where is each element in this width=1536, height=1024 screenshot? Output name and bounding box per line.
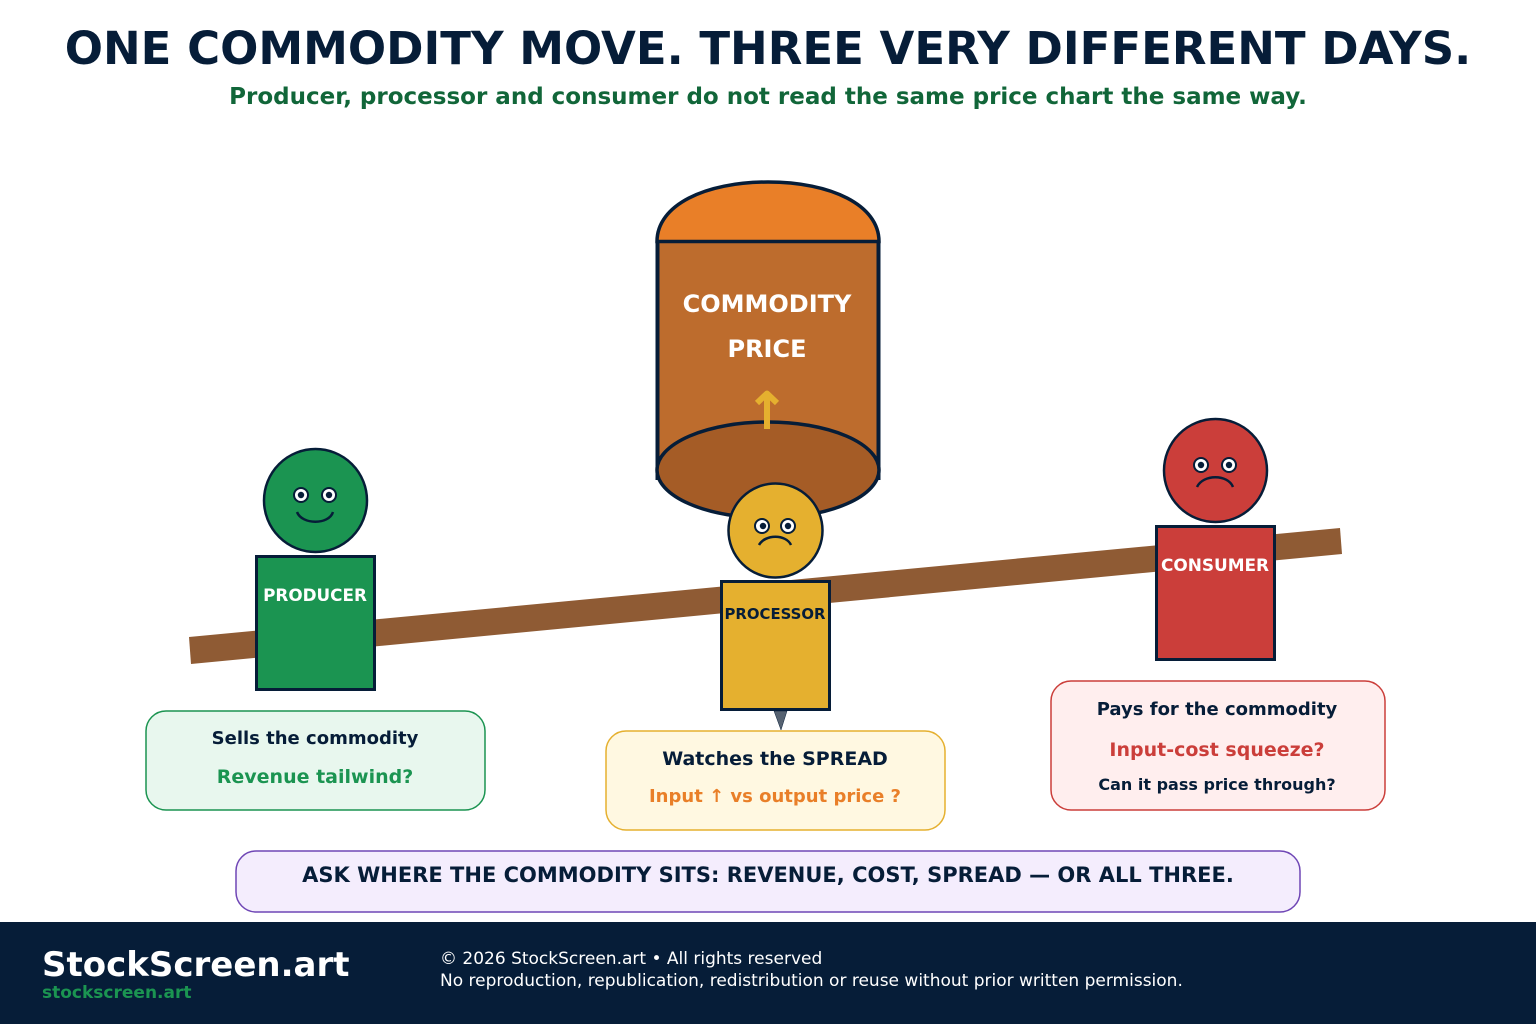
cylinder body <box>657 241 879 470</box>
callout: producer: Sells the commodity <box>212 728 419 749</box>
takeaway banner: ASK WHERE THE COMMODITY SITS: REVENUE, COST, SPREAD — OR ALL THREE. <box>302 863 1234 887</box>
title: ONE COMMODITY MOVE. THREE VERY DIFFERENT DAYS. <box>65 22 1471 75</box>
weight label: COMMODITY <box>683 290 852 318</box>
callout: consumer: Pays for the commodity <box>1097 699 1338 720</box>
producer eyes <box>294 488 336 502</box>
producer label: PRODUCER <box>263 585 367 605</box>
producer smile <box>297 512 333 522</box>
subtitle: Producer, processor and consumer do not read the same price chart the same way. <box>229 84 1307 110</box>
figure: consumer <box>1156 419 1274 660</box>
callout: producer <box>146 711 485 810</box>
callout: processor: Input ↑ vs output price ? <box>649 786 901 807</box>
seesaw plank <box>189 528 1342 664</box>
processor label: PROCESSOR <box>724 605 826 623</box>
consumer head <box>1164 419 1267 522</box>
takeaway banner <box>236 851 1300 912</box>
cylinder dome <box>657 182 879 242</box>
producer body <box>256 556 374 690</box>
footer: No reproduction, republication, redistribution or reuse without prior written permission. <box>440 971 1183 991</box>
callout: consumer: Input-cost squeeze? <box>1109 739 1325 761</box>
commodity price weight <box>657 182 879 518</box>
footer <box>0 922 1536 1024</box>
figure: processor <box>722 484 830 730</box>
callout: producer: Revenue tailwind? <box>217 766 413 788</box>
icon: up arrow <box>757 394 777 429</box>
callout: consumer <box>1051 681 1385 810</box>
callout: processor: Watches the SPREAD <box>662 748 888 770</box>
processor frown <box>759 537 791 545</box>
consumer label: CONSUMER <box>1161 555 1269 575</box>
pointer to processor callout <box>774 711 787 730</box>
callout: processor <box>606 731 945 830</box>
figure: producer <box>256 449 374 690</box>
processor eyes <box>755 519 795 533</box>
footer copyright: © 2026 StockScreen.art • All rights reserved <box>440 949 822 969</box>
consumer eyes <box>1194 458 1236 472</box>
cylinder base <box>657 422 879 518</box>
callout: consumer: Can it pass price through? <box>1098 775 1336 794</box>
commodity price weight: PRICE <box>727 335 807 363</box>
processor head <box>728 484 822 578</box>
footer: stockscreen.art <box>42 983 192 1003</box>
consumer body <box>1156 526 1274 660</box>
consumer frown <box>1197 477 1233 487</box>
producer head <box>264 449 367 552</box>
footer brand: StockScreen.art <box>42 945 349 985</box>
processor body <box>722 582 830 710</box>
